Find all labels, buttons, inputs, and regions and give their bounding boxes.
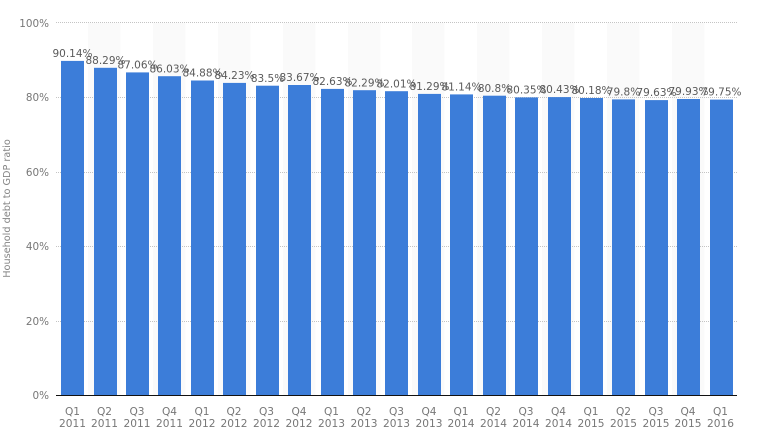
x axis labels: Q4 — [551, 406, 566, 418]
value labels: 90.14% — [52, 48, 93, 60]
x axis labels: 2015 — [610, 418, 637, 430]
x axis labels: Q1 — [713, 406, 728, 418]
x axis labels: 2012 — [253, 418, 280, 430]
value labels: 88.29% — [85, 55, 126, 67]
x axis labels: 2012 — [286, 418, 312, 430]
x axis labels: Q3 — [389, 406, 404, 418]
x axis labels: Q1 — [65, 406, 80, 418]
x axis labels: Q3 — [259, 406, 274, 418]
value labels: 87.06% — [117, 60, 158, 72]
x axis labels: 2016 — [707, 418, 734, 430]
x axis labels: 2014 — [448, 418, 475, 430]
x axis labels: Q3 — [648, 406, 664, 418]
value labels: 79.63% — [636, 87, 677, 99]
x axis labels: Q1 — [453, 406, 469, 418]
x axis labels: 2012 — [221, 418, 247, 430]
x axis labels: 2011 — [59, 418, 86, 430]
value labels: 82.01% — [376, 78, 417, 90]
x axis labels: 2013 — [383, 418, 410, 430]
value labels: 79.8% — [607, 86, 640, 98]
bars — [61, 61, 733, 395]
value labels: 82.29% — [344, 77, 385, 89]
value labels: 86.03% — [149, 63, 190, 75]
x axis labels: 2012 — [189, 418, 215, 430]
x axis labels: 2015 — [675, 418, 701, 430]
x axis labels: 2011 — [156, 418, 183, 430]
value labels: 80.43% — [539, 84, 580, 96]
value labels: 84.23% — [214, 70, 255, 82]
x axis labels: 2015 — [578, 418, 604, 430]
x axis labels: Q4 — [162, 406, 177, 418]
y axis labels: 60% — [26, 167, 49, 179]
value labels: 81.29% — [409, 81, 450, 93]
x axis labels: Q2 — [356, 406, 372, 418]
x axis labels: 2013 — [351, 418, 377, 430]
value labels: 79.93% — [668, 86, 709, 98]
y axis labels: 40% — [26, 241, 49, 253]
value labels: 81.14% — [441, 82, 482, 94]
x axis labels: 2014 — [513, 418, 540, 430]
value labels: 80.8% — [478, 83, 511, 95]
x axis labels: Q2 — [226, 406, 242, 418]
x axis labels: 2013 — [318, 418, 345, 430]
value labels: 79.75% — [701, 87, 742, 99]
y axis labels: 100% — [19, 18, 49, 30]
value labels — [52, 48, 742, 99]
value labels: 84.88% — [182, 68, 223, 80]
value labels: 83.5% — [251, 73, 284, 85]
x axis labels: 2014 — [480, 418, 507, 430]
x axis labels: Q4 — [680, 406, 696, 418]
x axis labels: Q4 — [421, 406, 437, 418]
x axis labels: Q1 — [324, 406, 339, 418]
x axis line — [56, 394, 737, 396]
value labels: 82.63% — [312, 76, 353, 88]
x axis labels: 2014 — [545, 418, 572, 430]
x axis labels: Q3 — [518, 406, 534, 418]
x axis labels: 2011 — [91, 418, 118, 430]
y axis labels: 0% — [33, 390, 49, 402]
y axis title: Household debt to GDP ratio — [2, 139, 13, 278]
value labels: 80.18% — [571, 85, 612, 97]
x axis labels: Q2 — [486, 406, 501, 418]
x axis labels: 2011 — [124, 418, 150, 430]
y axis labels: 20% — [26, 316, 49, 328]
x axis labels: Q1 — [194, 406, 210, 418]
x axis labels: Q3 — [129, 406, 145, 418]
y axis labels — [19, 18, 49, 402]
x axis labels — [59, 406, 734, 430]
value labels: 80.35% — [506, 84, 547, 96]
y axis labels: 80% — [26, 92, 49, 104]
x axis labels: 2015 — [643, 418, 669, 430]
x axis labels: Q2 — [616, 406, 631, 418]
alternating column bands — [88, 23, 704, 395]
x axis labels: Q4 — [291, 406, 307, 418]
x axis labels: Q2 — [97, 406, 112, 418]
grid lines — [56, 22, 737, 322]
x axis labels: 2013 — [416, 418, 442, 430]
value labels: 83.67% — [279, 72, 320, 84]
x axis labels: Q1 — [583, 406, 599, 418]
